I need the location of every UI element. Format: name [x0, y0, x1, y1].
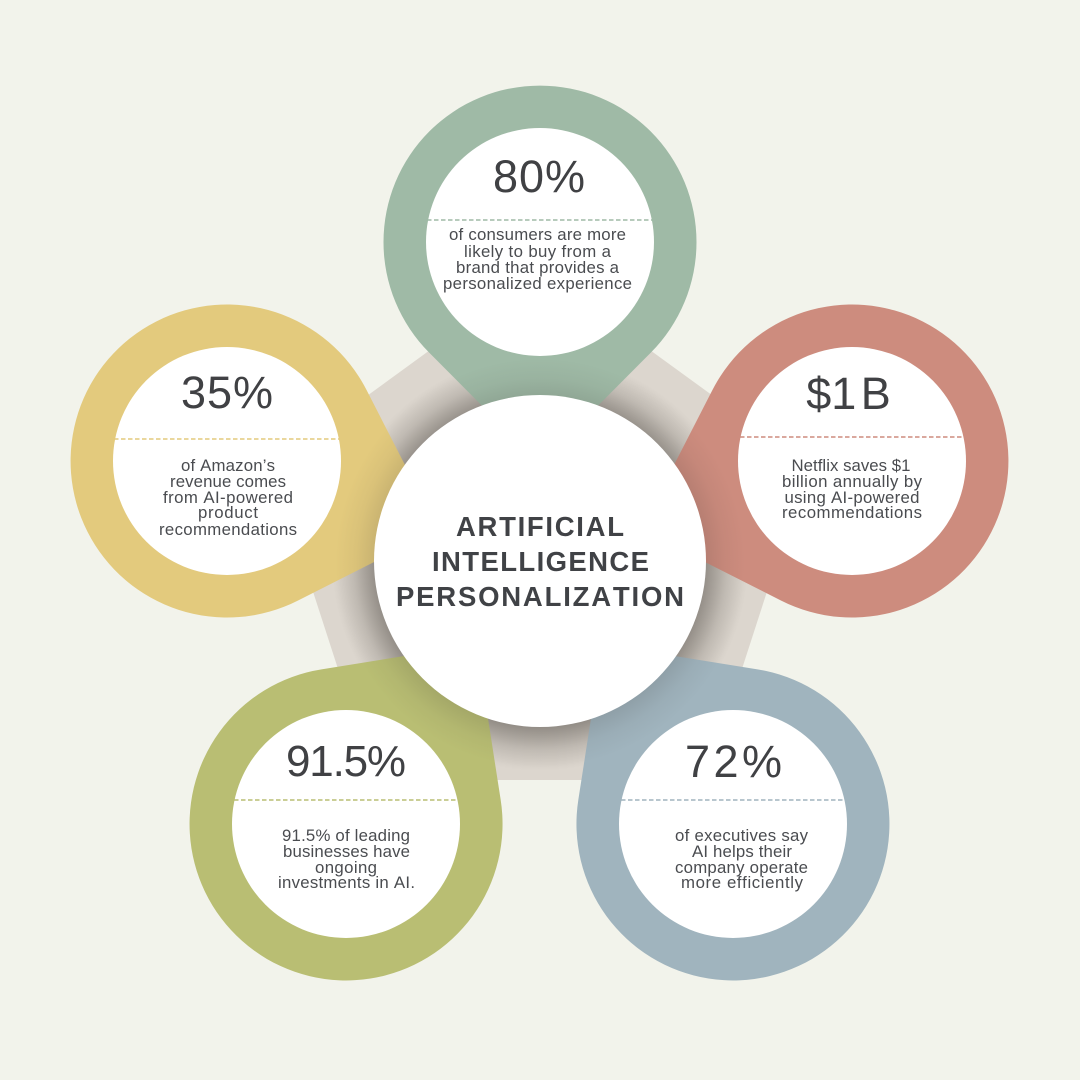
title: ARTIFICIAL: [456, 511, 624, 542]
panel: 72% executives: [476, 552, 952, 1043]
panel: 35% Amazon: [30, 264, 486, 678]
divider: [427, 219, 653, 221]
description: revenue comes: [170, 472, 286, 491]
pin: red: [593, 264, 1049, 678]
description: personalized experience: [443, 274, 632, 293]
description: of Amazon’s: [181, 456, 275, 475]
central hub circle: [374, 395, 706, 727]
title: PERSONALIZATION: [396, 581, 684, 612]
description: [278, 826, 415, 892]
description: of executives say: [675, 826, 809, 845]
pin: green: [384, 86, 696, 464]
description: investments in AI.: [278, 873, 415, 892]
divider: [114, 438, 340, 440]
stat: 72%: 72%: [685, 736, 782, 787]
panel: 80% consumers: [384, 86, 696, 464]
description: company operate: [675, 858, 808, 877]
divider: [234, 799, 460, 801]
description: likely to buy from a: [464, 242, 612, 261]
description: businesses have: [283, 842, 410, 861]
pentagon shadow: [332, 355, 748, 771]
pin: blue: [476, 552, 952, 1043]
description: [159, 456, 297, 539]
inner circle: [619, 710, 847, 938]
panel: 91.5% businesses: [127, 552, 603, 1043]
divider: [621, 799, 847, 801]
description: Netflix saves $1: [792, 456, 910, 475]
description: 91.5% of leading: [282, 826, 410, 845]
description: brand that provides a: [456, 258, 620, 277]
stat: 80%: 80%: [493, 151, 585, 202]
description: of consumers are more: [449, 225, 626, 244]
inner circle: [426, 128, 654, 356]
inner circle: [113, 347, 341, 575]
title: [396, 511, 684, 612]
panel: $1 B Netflix: [593, 264, 1049, 678]
inner circle: [232, 710, 460, 938]
hub shadow: [335, 358, 745, 768]
stat: $1 B: $1 B: [806, 368, 891, 419]
description: [443, 225, 632, 293]
description: using AI-powered: [784, 488, 920, 507]
pin: yellow: [30, 264, 486, 678]
stat: 91.5%: 91.5%: [286, 737, 406, 786]
description: recommendations: [159, 520, 297, 539]
divider: [740, 436, 966, 438]
description: [675, 826, 809, 892]
title: INTELLIGENCE: [432, 546, 649, 577]
description: billion annually by: [782, 472, 923, 491]
description: ongoing: [315, 858, 377, 877]
description: recommendations: [782, 503, 922, 522]
inner circle: [738, 347, 966, 575]
pin: olive: [127, 552, 603, 1043]
description: AI helps their: [692, 842, 792, 861]
description: product: [198, 503, 258, 522]
description: more efficiently: [681, 873, 804, 892]
stat: 35%: 35%: [181, 367, 273, 418]
description: from AI-powered: [163, 488, 293, 507]
description: [782, 456, 923, 522]
central pentagon: [272, 270, 808, 780]
